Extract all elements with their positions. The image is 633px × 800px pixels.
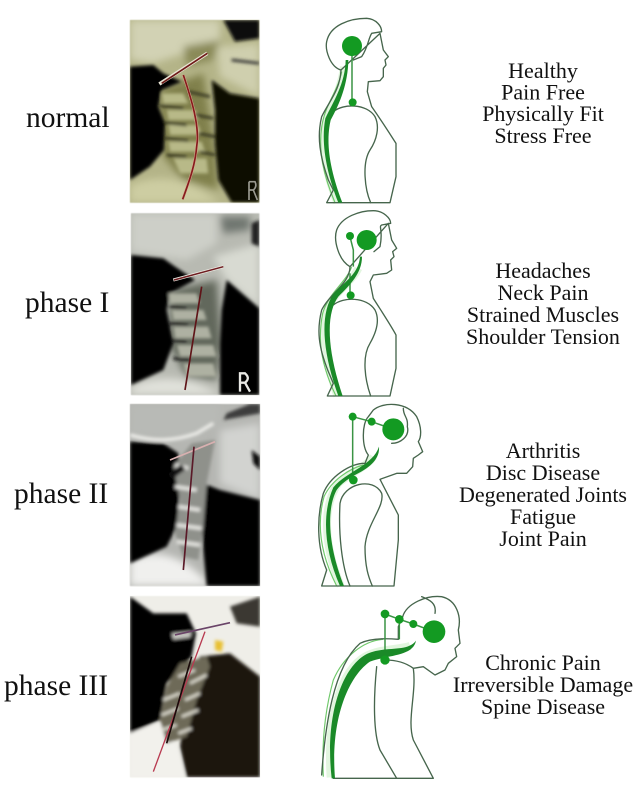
symptoms: phase II: Degenerated Joints <box>459 482 627 507</box>
figure: phase III posture <box>322 596 460 778</box>
figure: normal posture <box>319 18 396 203</box>
symptoms: phase II <box>459 438 627 551</box>
symptoms: phase I: Headaches <box>495 258 591 283</box>
symptoms: phase II: Arthritis <box>506 438 580 463</box>
symptoms: phase III: Irreversible Damage <box>453 672 633 697</box>
label: phase III: phase III <box>4 670 108 702</box>
figure: phase I posture <box>319 211 397 396</box>
symptoms: normal: Stress Free <box>494 123 592 148</box>
symptoms: phase I: Neck Pain <box>497 280 589 305</box>
symptoms: phase II: Joint Pain <box>499 526 587 551</box>
symptoms: phase III: Chronic Pain <box>485 650 601 675</box>
symptoms: phase III <box>453 650 633 719</box>
symptoms: phase I: Strained Muscles <box>467 302 619 327</box>
symptoms: phase III: Spine Disease <box>481 694 605 719</box>
symptoms: phase II: Disc Disease <box>486 460 600 485</box>
symptoms: normal <box>482 58 604 148</box>
symptoms: normal: Physically Fit <box>482 101 604 126</box>
symptoms: phase I: Shoulder Tension <box>466 324 620 349</box>
symptoms: normal: Pain Free <box>501 80 585 104</box>
figure: phase II posture <box>319 404 423 586</box>
x-ray: normal neck <box>130 20 259 203</box>
label: phase I: phase I <box>25 287 109 319</box>
symptoms: phase II: Fatigue <box>510 504 576 529</box>
symptoms: phase I <box>466 258 620 349</box>
x-ray: phase I neck <box>131 213 259 395</box>
x-ray: phase III neck <box>130 596 260 777</box>
label: normal: normal <box>26 102 110 134</box>
label: phase II: phase II <box>14 478 108 510</box>
x-ray: phase II neck <box>130 404 260 586</box>
symptoms: normal: Healthy <box>508 58 578 83</box>
